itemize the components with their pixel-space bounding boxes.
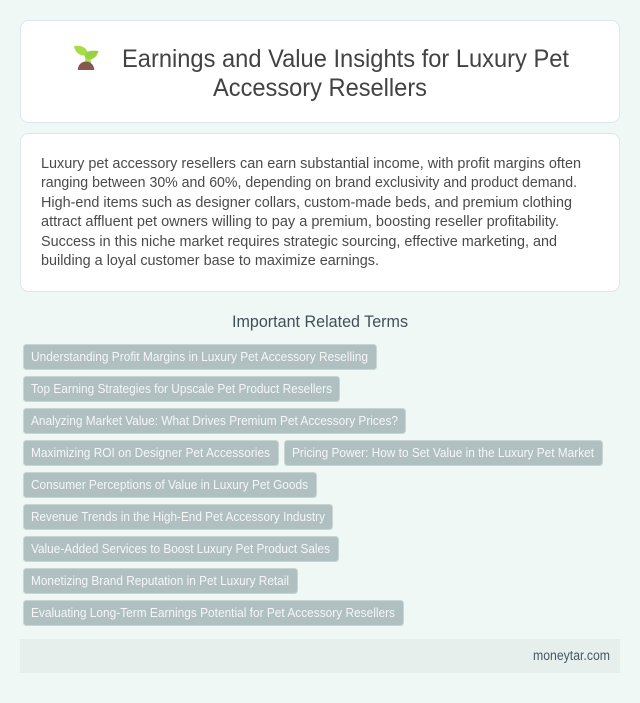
text block: summary paragraph: Luxury pet accessory resellers can earn substantial income, with profit margins often <box>41 155 581 172</box>
heading: title <box>122 45 569 102</box>
chip: revenue trends: Revenue Trends in the High-End Pet Accessory Industry <box>31 509 326 524</box>
chip: long-term earnings: Evaluating Long-Term Earnings Potential for Pet Accessory Resellers <box>31 605 395 620</box>
text block: summary paragraph: High-end items such as designer collars, custom-made beds, and premium clothing <box>41 194 572 211</box>
chip: long-term earnings <box>24 600 404 626</box>
chip: market value: Analyzing Market Value: What Drives Premium Pet Accessory Prices? <box>31 413 398 428</box>
icon: seedling <box>74 46 98 70</box>
text block: summary paragraph: building a loyal customer base to maximize earnings. <box>41 252 379 269</box>
chip: profit margins: Understanding Profit Margins in Luxury Pet Accessory Reselling <box>31 349 368 364</box>
panel: title card <box>20 20 620 122</box>
chip: consumer perceptions <box>24 472 316 498</box>
footer bar <box>20 639 620 673</box>
chip: earning strategies: Top Earning Strategies for Upscale Pet Product Resellers <box>31 381 332 396</box>
text block: summary paragraph: ranging between 30% and 60%, depending on brand exclusivity and product demand. <box>41 174 577 191</box>
chip: brand reputation <box>24 568 298 594</box>
chip: consumer perceptions: Consumer Perceptions of Value in Luxury Pet Goods <box>31 477 308 492</box>
chip: profit margins <box>24 344 376 370</box>
chip: revenue trends <box>24 504 332 530</box>
chip: brand reputation: Monetizing Brand Reputation in Pet Luxury Retail <box>31 573 289 588</box>
text block: summary paragraph: Success in this niche market requires strategic sourcing, effective marketing, and <box>41 233 557 250</box>
chip: pricing power: Pricing Power: How to Set Value in the Luxury Pet Market <box>292 445 594 460</box>
heading: important related terms: Important Related Terms <box>232 313 408 331</box>
chip: earning strategies <box>24 376 340 402</box>
chip: maximizing ROI <box>24 440 278 466</box>
chip: market value <box>24 408 406 434</box>
heading: title: Accessory Resellers <box>213 74 427 102</box>
text block: summary paragraph <box>41 155 581 269</box>
chip: pricing power <box>284 440 602 466</box>
chip: value-added services <box>24 536 338 562</box>
footer source text: moneytar.com <box>533 648 610 663</box>
panel: summary card <box>20 134 620 292</box>
panel: related term chips <box>24 344 602 626</box>
chip: value-added services: Value-Added Services to Boost Luxury Pet Product Sales <box>31 541 330 556</box>
heading: title: Earnings and Value Insights for Luxury Pet <box>122 45 569 73</box>
chip: maximizing ROI: Maximizing ROI on Designer Pet Accessories <box>31 445 270 460</box>
text block: summary paragraph: attract affluent pet owners willing to pay a premium, boosting reseller profitability. <box>41 213 559 230</box>
